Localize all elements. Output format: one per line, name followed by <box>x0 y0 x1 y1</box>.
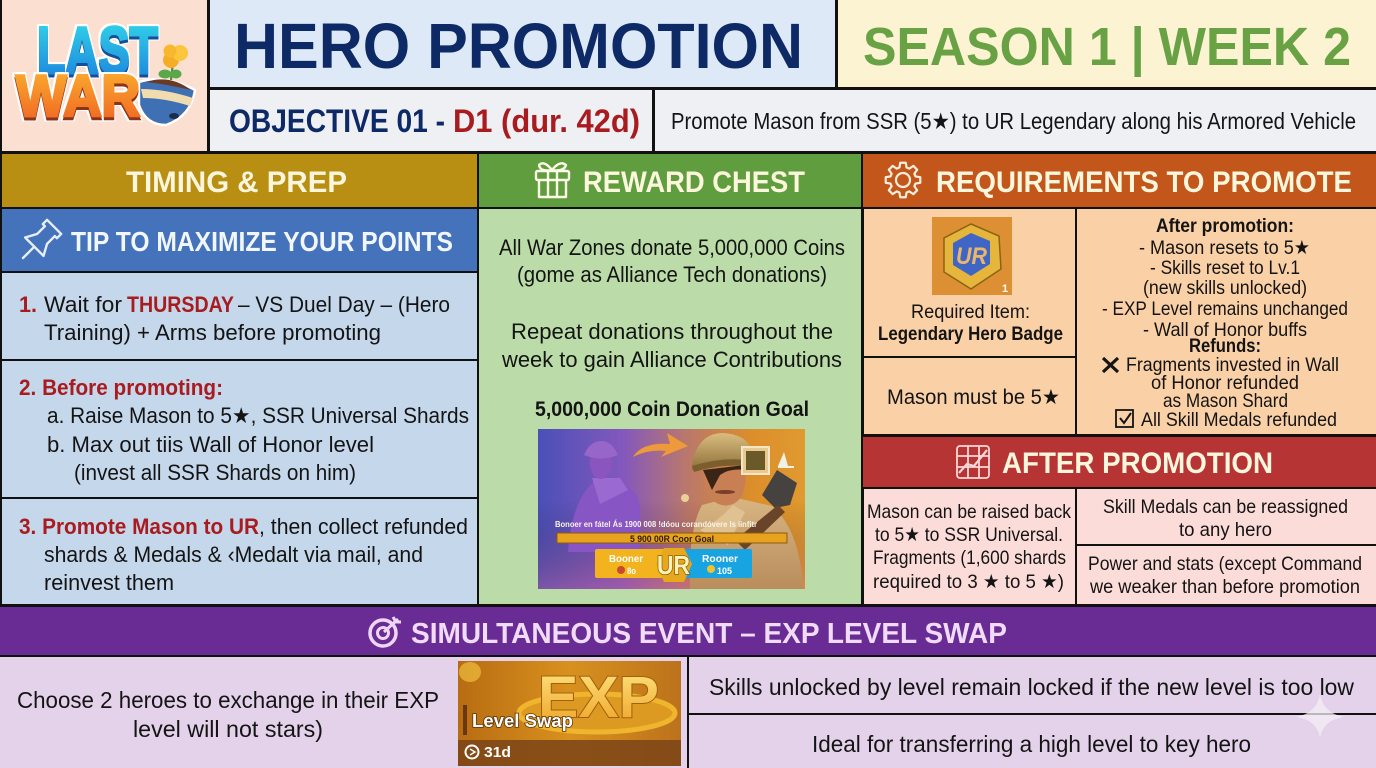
panel: after promotion header <box>863 437 1376 487</box>
text: tip 2: b. Max out tiis Wall of Honor level <box>47 432 374 457</box>
text: after promotion list: - Wall of Honor buffs <box>1143 319 1307 341</box>
text: after promotion list: After promotion: <box>1156 215 1294 237</box>
text: tip 2: a. Raise Mason to 5★, SSR Universal Shards <box>47 403 469 428</box>
heading: tip: TIP TO MAXIMIZE YOUR POINTS <box>71 226 453 257</box>
heading: objective label: D1 (dur. 42d) <box>453 103 640 139</box>
panel: reward chest <box>479 209 861 604</box>
text: raise back: Fragments (1,600 shards <box>873 547 1066 569</box>
text: required item: Required Item: <box>911 301 1030 323</box>
text: ideal transfer: Ideal for transferring a high level to key hero <box>812 731 1251 757</box>
text: skill medals <box>1103 496 1348 541</box>
text: repeat donations: Repeat donations throughout the <box>511 319 833 344</box>
text: tip 1: – VS Duel Day – (Hero <box>238 292 450 317</box>
panel: mason must be five stars <box>864 358 1075 434</box>
text: refunded fragments <box>1126 354 1339 412</box>
illustration: Mason promotion <box>538 429 805 589</box>
text: raise back: required to 3 ★ to 5 ★) <box>873 571 1064 593</box>
text: raise back: Mason can be raised back <box>867 501 1071 523</box>
text: tip 1: Wait for <box>44 292 122 317</box>
icon: UR badge <box>932 217 1012 295</box>
text: required item: Legendary Hero Badge <box>878 323 1063 345</box>
icon: gear <box>886 163 920 197</box>
text: after promotion list: - Mason resets to 5★ <box>1139 237 1310 259</box>
panel: tip 3 <box>2 499 477 604</box>
illustration: Mason promotion: Bonoer en fátel Ás 1900 008 !dóou corandóvere ls íinfitr <box>555 520 757 529</box>
panel: objective description <box>655 90 1376 151</box>
panel: ideal transfer <box>689 715 1376 768</box>
illustration: Mason promotion: UR <box>657 550 690 580</box>
illustration: Mason promotion: Booner <box>609 554 643 565</box>
panel: tip 2 <box>2 361 477 497</box>
text: tip 1: Training) + Arms before promoting <box>44 320 381 345</box>
text: tip 3: 3. Promote Mason to UR <box>19 514 259 539</box>
text: after promotion list: - EXP Level remains unchanged <box>1102 298 1348 320</box>
text: tip 3: , then collect refunded <box>259 514 468 539</box>
heading: reward chest: REWARD CHEST <box>583 166 805 199</box>
heading: objective label <box>229 103 640 139</box>
text: refunded fragments: Fragments invested in Wall <box>1126 354 1339 376</box>
panel: logo <box>2 0 207 151</box>
icon: target <box>370 617 401 646</box>
icon: sparkle watermark <box>1296 694 1344 738</box>
panel: season <box>838 0 1376 87</box>
icon: pushpin <box>14 218 63 267</box>
text: donate coins <box>499 235 845 287</box>
panel: power and stats <box>1077 546 1376 604</box>
icon: gift <box>536 163 569 197</box>
icon: checkbox <box>1116 410 1133 427</box>
text: after promotion list: (new skills unlocked) <box>1143 277 1307 299</box>
panel: after promotion notes <box>1077 209 1376 434</box>
text: tip 1: 1. <box>19 292 37 317</box>
panel: tip header <box>2 209 477 271</box>
illustration: Mason promotion: 105 <box>717 566 732 576</box>
text: tip 2 <box>19 375 469 485</box>
text: tip 3: reinvest them <box>44 570 174 595</box>
heading: requirements to promote: REQUIREMENTS TO PROMOTE <box>936 166 1352 199</box>
text: exp swap description: level will not stars) <box>133 716 323 742</box>
heading: hero promotion: HERO PROMOTION <box>234 10 803 82</box>
text: donate coins: (gome as Alliance Tech donations) <box>517 262 827 287</box>
heading: objective label: OBJECTIVE 01 - <box>229 103 445 139</box>
text: required item <box>878 301 1063 345</box>
panel: simultaneous event header <box>0 607 1376 655</box>
panel: required item <box>864 209 1075 356</box>
heading: season and week: SEASON 1 | WEEK 2 <box>863 17 1351 78</box>
panel: tip 1 <box>2 273 477 359</box>
illustration: Mason promotion: Rooner <box>702 554 738 565</box>
illustration: EXP level swap: Level Swap <box>472 711 573 731</box>
text: raise back: to 5★ to SSR Universal. <box>875 524 1063 546</box>
text: medals refunded: All Skill Medals refunded <box>1141 409 1337 431</box>
text: donation goal: 5,000,000 Coin Donation Goal <box>535 398 809 421</box>
text: repeat donations: week to gain Alliance Contributions <box>501 347 842 372</box>
heading: simultaneous event: SIMULTANEOUS EVENT – EXP LEVEL SWAP <box>411 618 1007 650</box>
text: tip 2: (invest all SSR Shards on him) <box>74 460 356 485</box>
text: tip 3 <box>19 514 468 595</box>
icon: cross <box>1103 358 1118 372</box>
text: skills unlocked: Skills unlocked by level remain locked if the new level is too low <box>709 674 1354 700</box>
text: skill medals: Skill Medals can be reassigned <box>1103 496 1348 518</box>
illustration: Mason promotion: 5 900 00R Coor Goal <box>630 534 714 544</box>
text: refunded fragments: as Mason Shard <box>1163 390 1288 412</box>
text: refunded fragments: of Honor refunded <box>1151 372 1299 394</box>
panel: objective <box>210 90 652 151</box>
panel: title <box>210 0 835 87</box>
text: skill medals: to any hero <box>1179 519 1272 541</box>
text: exp swap description: Choose 2 heroes to exchange in their EXP <box>17 687 439 713</box>
panel: exp swap description <box>0 657 687 768</box>
icon: Last War logo: LAST <box>37 13 158 87</box>
panel: raise back <box>864 489 1075 604</box>
panel: requirements header <box>863 154 1376 207</box>
panel: skills unlocked <box>689 657 1376 713</box>
text: tip 1 <box>19 292 450 345</box>
icon: UR badge: UR <box>956 243 988 270</box>
text: mason five stars: Mason must be 5★ <box>887 386 1060 409</box>
text: tip 1: THURSDAY <box>127 292 234 317</box>
text: power and stats <box>1088 553 1362 598</box>
icon: Last War logo: WAR <box>16 64 140 129</box>
panel: skill medals <box>1077 489 1376 544</box>
illustration: Mason promotion: 8o <box>627 566 636 576</box>
text: after promotion list: Refunds: <box>1189 335 1261 357</box>
text: repeat donations <box>501 319 842 372</box>
text: power and stats: we weaker than before promotion <box>1089 576 1360 598</box>
illustration: EXP level swap: EXP <box>538 665 659 730</box>
panel: reward chest header <box>479 154 861 207</box>
panel: timing and prep header <box>2 154 477 207</box>
heading: timing and prep: TIMING & PREP <box>126 166 347 199</box>
text: tip 2: 2. Before promoting: <box>19 375 223 400</box>
heading: after promotion: AFTER PROMOTION <box>1002 447 1273 480</box>
icon: chart grid <box>957 446 989 478</box>
text: after promotion list <box>1102 215 1348 357</box>
text: donate coins: All War Zones donate 5,000,000 Coins <box>499 235 845 260</box>
icon: Last War logo <box>16 13 195 129</box>
illustration: EXP level swap <box>458 661 681 766</box>
text: tip 3: shards & Medals & ‹Medalt via mail, and <box>44 542 423 567</box>
text: exp swap description <box>17 687 439 742</box>
text: after promotion list: - Skills reset to Lv.1 <box>1150 257 1300 279</box>
illustration: EXP level swap: 31d <box>484 744 511 761</box>
icon: UR badge: 1 <box>1002 283 1008 295</box>
text: raise back <box>867 501 1071 593</box>
